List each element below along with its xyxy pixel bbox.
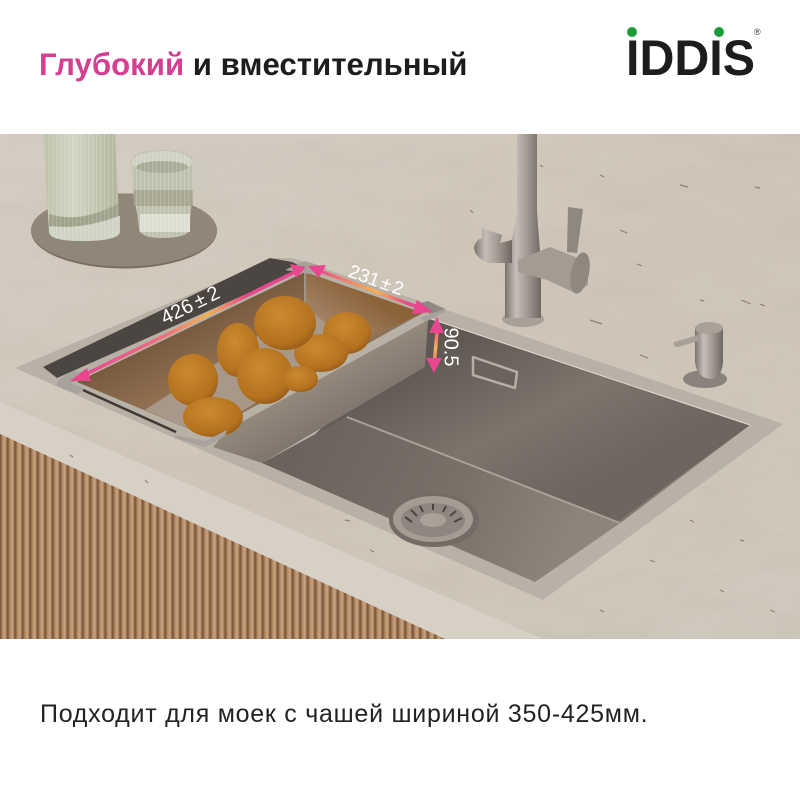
corner clip top bbox=[285, 261, 327, 274]
countertop bbox=[0, 134, 800, 640]
dimension: 426 ± 2 bbox=[70, 264, 306, 381]
left handle bbox=[474, 228, 512, 263]
basket front rim bbox=[83, 390, 176, 432]
soap dispenser bbox=[674, 322, 727, 388]
photo: kitchen sink with basket bbox=[0, 134, 800, 639]
wood slat panel bbox=[0, 430, 450, 640]
coaster mat bbox=[31, 194, 217, 268]
right cylinder bbox=[518, 247, 588, 293]
right wall bbox=[535, 425, 750, 582]
lever bbox=[567, 207, 583, 253]
caption: Подходит для моек с чашей шириной 350-425мм. bbox=[40, 700, 648, 728]
ribbed bottle bbox=[43, 134, 120, 241]
ribbed glass bbox=[131, 150, 193, 238]
dimension: 90.5: 90.5 bbox=[440, 328, 462, 366]
corner clip bottom bbox=[175, 430, 227, 447]
title: Глубокий и вместительный bbox=[39, 47, 467, 82]
logo: IDDIS: ® bbox=[754, 27, 761, 37]
oranges bbox=[168, 296, 371, 437]
dimension: 90.5 bbox=[426, 317, 462, 373]
faucet bbox=[474, 134, 593, 327]
basket floor bbox=[145, 305, 350, 435]
basket outer face bbox=[213, 320, 428, 463]
dimension: 231 ± 2: 231 ± 2 bbox=[345, 261, 406, 300]
basket interior base bbox=[77, 272, 423, 435]
basket interior right wall bbox=[305, 272, 423, 345]
faucet base bbox=[502, 311, 544, 327]
dimension: 231 ± 2 bbox=[308, 261, 433, 314]
dark slot behind basket bbox=[43, 258, 305, 378]
basket interior left wall bbox=[77, 272, 305, 410]
corner clip right bbox=[420, 308, 445, 322]
dimension: 426 ± 2: 426 ± 2 bbox=[157, 282, 223, 329]
brand plate bbox=[473, 357, 517, 388]
corner clip left bbox=[57, 371, 86, 394]
sink bbox=[15, 258, 783, 600]
faucet column bbox=[505, 134, 541, 318]
basket bbox=[43, 258, 445, 463]
back wall of bowl bbox=[300, 318, 750, 523]
sink rim bbox=[15, 258, 783, 600]
drain bbox=[389, 493, 479, 547]
bowl floor bbox=[262, 417, 620, 582]
